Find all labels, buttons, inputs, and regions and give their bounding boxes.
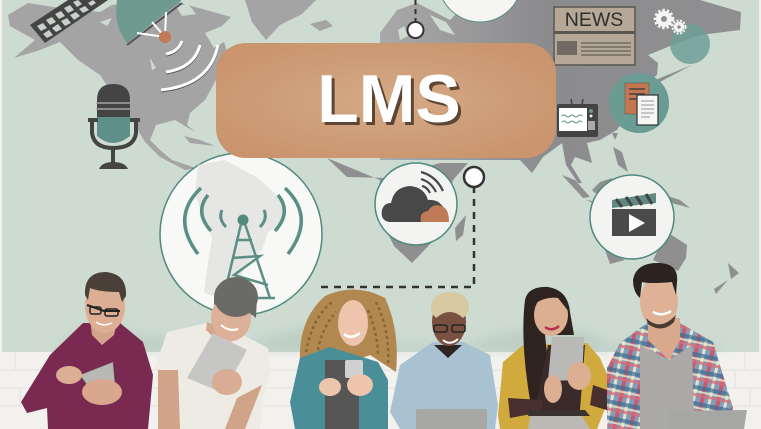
new zealand bbox=[714, 263, 739, 294]
icon: satellite dish bbox=[116, 0, 218, 91]
laptop bbox=[416, 409, 487, 429]
icon: film clapper circle bbox=[590, 175, 674, 259]
madagascar bbox=[455, 215, 466, 241]
australia bbox=[605, 232, 687, 271]
hudson bay and lakes bbox=[100, 4, 196, 70]
icon: solar panel bbox=[30, 0, 108, 43]
caribbean islands bbox=[184, 136, 215, 146]
person 5: yellow cardigan with tablet bbox=[498, 287, 613, 429]
news heading: NEWS bbox=[565, 9, 623, 31]
dashed connector: top pin bbox=[414, 0, 416, 22]
person 3: curly hair with phone bbox=[290, 289, 397, 429]
africa bbox=[327, 158, 468, 263]
southeast asia islands bbox=[562, 133, 628, 206]
person 1: maroon shirt with tablet bbox=[21, 272, 153, 429]
greenland bbox=[245, 0, 316, 40]
icon: news sheet bbox=[554, 7, 635, 65]
baltic sea bbox=[398, 15, 455, 40]
top circle bbox=[438, 0, 522, 22]
dashed connector: cloud pin to people bbox=[315, 186, 474, 287]
icon: television bbox=[557, 99, 598, 137]
pacific island dots bbox=[646, 65, 692, 208]
person 4: blonde hair with laptop bbox=[390, 292, 498, 429]
person 2: beanie with tablet bbox=[155, 277, 271, 429]
LMS text shadow: LMS bbox=[320, 64, 464, 140]
world map bbox=[8, 0, 741, 294]
north america bbox=[8, 0, 231, 170]
icon: cloud circle bbox=[375, 163, 457, 245]
icon: antenna tower circle bbox=[160, 153, 322, 315]
wall shadow behind people bbox=[60, 325, 720, 352]
icon: documents on globe bbox=[609, 73, 669, 133]
pin: cloud bbox=[464, 167, 484, 187]
LMS title: LMS bbox=[317, 61, 461, 137]
eurasia bbox=[380, 0, 741, 183]
iceland bbox=[310, 20, 333, 31]
person 6: plaid shirt with laptop bbox=[607, 263, 747, 429]
LMS banner bbox=[216, 43, 556, 158]
icon: microphone bbox=[88, 84, 140, 169]
pin: top bbox=[408, 22, 424, 38]
laptop bbox=[668, 410, 747, 429]
icon: gears bbox=[655, 10, 686, 34]
icon: teal globe small bbox=[670, 24, 710, 64]
